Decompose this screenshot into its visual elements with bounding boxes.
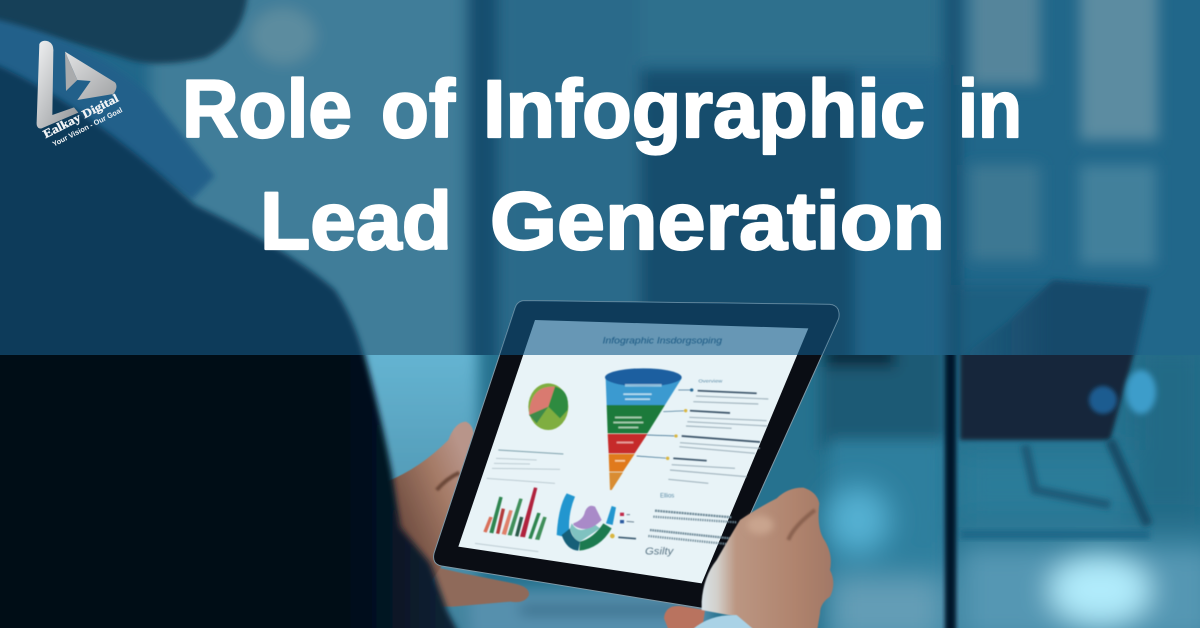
person: shirt collar: [0, 18, 215, 200]
title line 2: Generation: [490, 176, 945, 267]
shirt cuff: [688, 615, 758, 628]
title line 2: Lead: [260, 176, 452, 267]
screen footnote notes: Ellios: [660, 493, 674, 499]
right hand group: [664, 488, 833, 628]
title line 1: of: [381, 64, 456, 155]
screen footnote notes: Gsilty: [645, 546, 674, 557]
background: office scene upper band: [54, 0, 1200, 355]
screen contents: [475, 335, 768, 557]
donut chart with figure: [557, 493, 636, 551]
title line 2: [260, 176, 945, 267]
logo play mark: [65, 52, 116, 100]
right hand: [702, 488, 833, 628]
right hand knuckle highlight: [747, 516, 773, 534]
left hand lower finger: [433, 567, 529, 607]
funnel callout lines and text: Overview: [698, 378, 723, 383]
tablet and right hand: [434, 301, 839, 628]
right hand thumb crease: [788, 510, 815, 540]
left hand palm and thumb: [387, 422, 474, 583]
pie chart: [528, 383, 568, 430]
logo name: Ealkay Digital: [41, 91, 121, 141]
background: office scene lower area: [360, 355, 1200, 628]
funnel callout lines and text: [637, 378, 768, 483]
screen footnote notes: [645, 493, 737, 557]
person: head silhouette: [0, 0, 365, 360]
title line 1: Role: [182, 64, 352, 155]
band tint over tablet: [500, 300, 839, 355]
tablet screen: [458, 320, 808, 583]
person: dark jacket: [0, 340, 462, 628]
title line 1: in: [958, 64, 1022, 155]
tablet body: [434, 301, 839, 608]
logo: Ealkay Digital: [37, 41, 124, 148]
logo L mark: [37, 41, 78, 128]
person: shoulder in band: [0, 62, 365, 360]
bar chart: [475, 450, 563, 552]
left hand: [387, 422, 529, 607]
logo play mark facet: [65, 52, 77, 91]
logo tagline: Your Vision - Our Goal: [51, 105, 124, 148]
screen heading: Infographic Insdorgsoping: [603, 335, 723, 345]
title: [182, 64, 1022, 267]
right hand lower finger: [664, 606, 705, 628]
title line 1: Infographic: [483, 64, 925, 155]
funnel chart: [605, 368, 682, 490]
title line 1: [182, 64, 1022, 155]
